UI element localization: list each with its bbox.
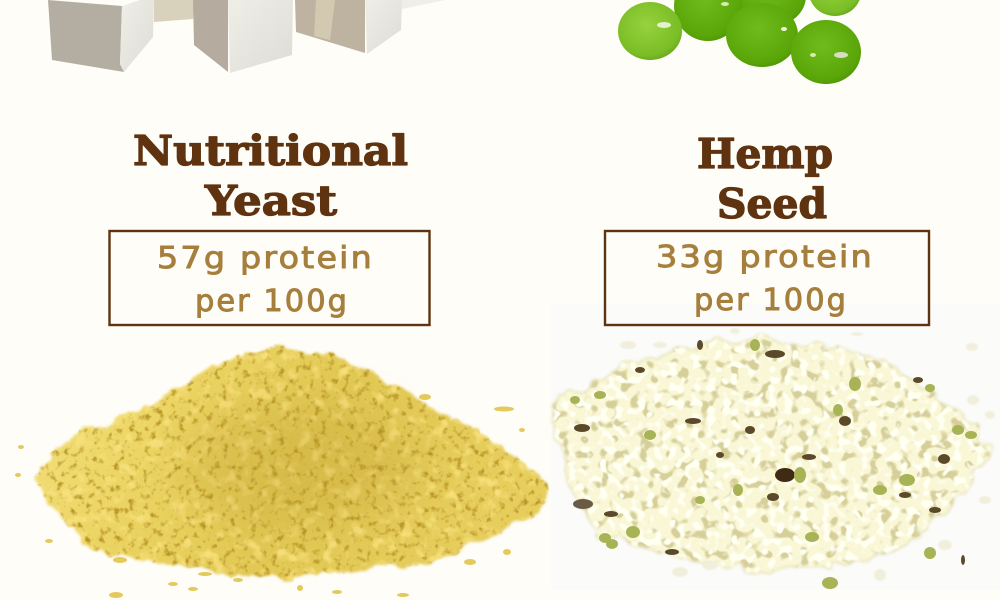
green hull seeds: [570, 339, 977, 589]
callout box: 33g protein per 100g: 33g protein: [656, 240, 874, 275]
heading: Hemp Seed: [697, 130, 833, 228]
callout box: 57g protein per 100g: 57g protein: [157, 241, 374, 276]
image: tofu cubes: [48, 0, 445, 73]
heading: Nutritional Yeast: [133, 127, 408, 225]
scattered yeast flakes: [15, 394, 525, 600]
image: nutritional yeast pile: [15, 347, 546, 600]
heading: Hemp Seed: Hemp: [697, 130, 833, 178]
image: green peas: [618, 0, 861, 84]
callout box: 33g protein per 100g: per 100g: [694, 283, 848, 318]
loose pale seeds: [620, 328, 995, 581]
heading: Nutritional Yeast: Nutritional: [133, 127, 408, 175]
heading: Nutritional Yeast: Yeast: [204, 177, 337, 225]
heading: Hemp Seed: Seed: [717, 180, 827, 228]
panel: hemp seed text: [605, 130, 929, 325]
dark hull seeds: [573, 340, 965, 565]
callout box: 33g protein per 100g: [605, 231, 929, 325]
darker shading at centre of pile: [180, 400, 420, 530]
callout box: 57g protein per 100g: [110, 231, 430, 325]
callout box: 57g protein per 100g: per 100g: [195, 284, 349, 319]
image: hemp seed photo: [551, 304, 1000, 590]
panel: nutritional yeast text: [110, 127, 430, 325]
